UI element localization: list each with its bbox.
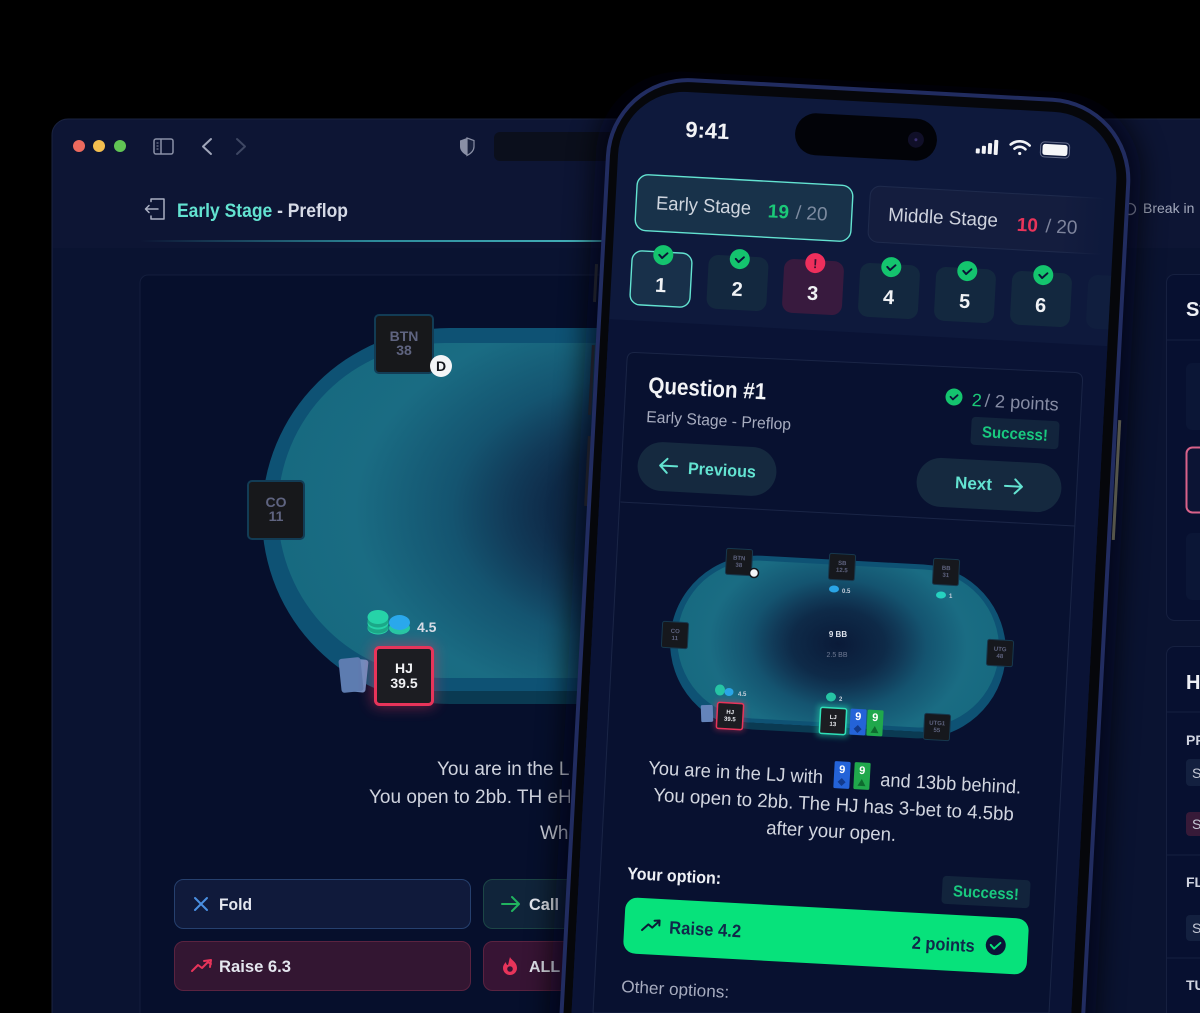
- pot amount: 2.5 BB: [826, 652, 848, 659]
- seat: HJ, highlighted: 39.5: [724, 717, 736, 723]
- pot amount: 9 BB: [829, 630, 847, 639]
- seat: HJ, highlighted: [714, 700, 746, 732]
- seat: HJ, highlighted: HJ: [395, 660, 413, 676]
- seat: HJ, highlighted: [372, 644, 435, 707]
- SB chips: [829, 586, 851, 595]
- question text: You open to 2bb. The HJ has 3-bet to 4.5bb: [653, 785, 1014, 826]
- chip stack with amount 4.5: [368, 610, 437, 635]
- window controls: [73, 140, 126, 152]
- question subtitle: Early Stage - Preflop: [646, 409, 792, 434]
- inline card: green nine: [853, 762, 871, 790]
- poker table: [262, 328, 1062, 704]
- tab: Early Stage: Early Stage: [656, 193, 752, 219]
- seat: SB: 12.5: [836, 568, 848, 574]
- answer buttons: [174, 880, 614, 990]
- question 2: [706, 247, 769, 312]
- icon: wifi: [1010, 141, 1030, 156]
- button: Next: [915, 457, 1063, 513]
- label: other options: Other options:: [621, 977, 730, 1002]
- seat: CO: 11: [269, 508, 284, 524]
- dealer button: [430, 355, 452, 377]
- hole card: green nine: [866, 710, 884, 736]
- table felt: [666, 551, 1010, 743]
- seat: UTG1: UTG1: [929, 721, 946, 727]
- HJ chips: [715, 684, 747, 698]
- seat: CO: 11: [671, 636, 679, 642]
- icon: privacy shield: [460, 138, 474, 156]
- dealer button: [750, 568, 758, 578]
- seat: BTN: [725, 548, 753, 576]
- seat: SB: [828, 553, 856, 581]
- question 6: [1010, 263, 1073, 328]
- seat: LJ, hero: LJ: [829, 715, 837, 721]
- seat: BTN: BTN: [733, 556, 745, 562]
- label: your option: Your option:: [627, 864, 722, 888]
- question text: and 13bb behind.: [880, 770, 1022, 799]
- address bar: [494, 132, 624, 161]
- hole card: blue nine: 9: [855, 711, 862, 723]
- tab: Middle Stage: 10: [1016, 215, 1038, 237]
- seat: BTN: [375, 315, 433, 373]
- status bar time: 9:41: [685, 117, 730, 144]
- seat: UTG: UTG: [994, 647, 1007, 653]
- dealer button: D: [436, 358, 446, 374]
- seat: CO: [661, 621, 689, 649]
- question 3, wrong: !: [813, 256, 818, 271]
- button: Raise 6.3: Raise 6.3: [219, 957, 291, 976]
- BB chip: 1: [949, 594, 953, 600]
- phone frame: [549, 74, 1135, 1013]
- tab: Middle Stage: / 20: [1045, 216, 1078, 239]
- icon: back and forward chevrons: [203, 139, 245, 154]
- BB chip: [936, 592, 953, 600]
- phone side buttons: [584, 264, 1121, 540]
- question 7, partly hidden: [1086, 274, 1148, 332]
- points score: [945, 388, 1059, 415]
- seat: UTG: [986, 639, 1014, 667]
- LJ chip: 2: [839, 697, 843, 703]
- question numbers: [629, 245, 1072, 327]
- chip stack with amount 4.5: 4.5: [417, 619, 437, 635]
- question text: You are in the LJ with: [648, 758, 824, 788]
- question 4: 4: [882, 287, 896, 309]
- LJ chip: [826, 692, 843, 703]
- inline card: blue nine: 9: [839, 764, 846, 776]
- pot amount: [826, 630, 848, 659]
- status chip: success: [941, 876, 1031, 908]
- SB chips: 0.5: [842, 589, 851, 595]
- inline card: blue nine: [833, 761, 851, 789]
- seat: BB: [932, 558, 960, 586]
- question 3, wrong: [782, 251, 845, 316]
- question 1, current: [630, 243, 693, 308]
- button: Previous: Previous: [687, 459, 756, 482]
- question 4: [858, 255, 921, 320]
- question 1, current: 1: [654, 275, 667, 297]
- button: Fold: Fold: [219, 895, 252, 914]
- tab: Early Stage: 19: [767, 201, 790, 223]
- selected answer: Raise 4.2: Raise 4.2: [669, 918, 742, 941]
- seat: CO: CO: [266, 494, 287, 510]
- question text, clipped by phone: You are in the LJ: [437, 759, 579, 780]
- mini poker table: [661, 548, 1014, 743]
- status chip: success: [970, 417, 1060, 449]
- status chip: success: Success!: [982, 424, 1048, 445]
- seat: BB: BB: [942, 566, 951, 572]
- icon: exit door: [146, 199, 164, 219]
- question text: after your open.: [766, 818, 897, 846]
- tab: Early Stage: / 20: [795, 203, 828, 226]
- heading: question number: Question #1: [648, 372, 767, 404]
- seat: BB: 31: [942, 573, 950, 579]
- seat: BTN: 38: [735, 563, 743, 569]
- question text: [648, 758, 1022, 846]
- heading: stage title: Early Stage - Preflop: [177, 201, 348, 222]
- seat: LJ, hero: 13: [829, 722, 837, 728]
- dynamic island: [794, 112, 938, 162]
- question text, clipped by phone: [370, 761, 570, 839]
- button: Raise 6.3: [174, 942, 470, 990]
- tab: Early Stage: [635, 174, 853, 242]
- seat: UTG: 48: [996, 654, 1004, 660]
- question 5: [934, 259, 997, 324]
- HJ chips: 4.5: [738, 692, 747, 698]
- icon: cellular signal: [976, 139, 998, 155]
- hole card: green nine: 9: [872, 712, 879, 724]
- panel: hand history sidebar: [1166, 646, 1200, 1013]
- question text, clipped by phone: You open to 2bb. TH eHJ: [369, 787, 581, 808]
- question 5: 5: [958, 291, 971, 313]
- seat: LJ, hero: [816, 704, 850, 738]
- tab: Middle Stage: [868, 186, 1088, 254]
- icon: sidebar toggle: [154, 139, 173, 154]
- hole card: blue nine: [849, 709, 867, 735]
- question 2: 2: [731, 279, 743, 301]
- icon: battery: [1040, 142, 1070, 158]
- status chip: success: Success!: [953, 883, 1019, 904]
- tab: Middle Stage: Middle Stage: [888, 205, 999, 232]
- seat: SB: SB: [838, 561, 847, 567]
- question 6: 6: [1034, 295, 1047, 317]
- panel: question table area: [140, 275, 700, 1013]
- points score: 2: [971, 390, 982, 410]
- button: Call: Call: [529, 895, 559, 914]
- panel: question card: [593, 352, 1083, 1013]
- phone: [541, 67, 1148, 1013]
- button: ALL IN: [483, 941, 564, 991]
- points score: / 2 points: [984, 391, 1059, 415]
- panel: stats sidebar: [1166, 274, 1200, 620]
- seat: CO: [248, 481, 304, 539]
- seat: UTG1: 55: [933, 728, 941, 734]
- selected answer: Raise 4.2: 2 points: [911, 933, 975, 956]
- inline card: green nine: 9: [859, 765, 866, 777]
- seat: HJ, highlighted: HJ: [726, 710, 734, 716]
- seat: UTG1: [923, 713, 951, 741]
- button: Fold: [174, 880, 470, 928]
- seat: CO: CO: [671, 629, 680, 635]
- button: Previous: [636, 441, 778, 497]
- screen content clipped to display: [629, 174, 1088, 327]
- seat: BTN: BTN: [390, 328, 418, 344]
- folded cards: [338, 657, 369, 693]
- break timer: Break in: [1143, 200, 1194, 216]
- question text, clipped by phone: What: [540, 823, 585, 844]
- button: Call: [483, 879, 567, 929]
- folded cards: [701, 705, 713, 722]
- button: Next: Next: [955, 473, 993, 494]
- phone shadow: [541, 67, 1145, 1013]
- seat: HJ, highlighted: 39.5: [390, 675, 418, 691]
- question 3, wrong: 3: [806, 283, 819, 305]
- button: ALL IN: ALL IN: [529, 959, 580, 976]
- selected answer: Raise 4.2: [623, 897, 1029, 975]
- seat: BTN: 38: [396, 342, 412, 358]
